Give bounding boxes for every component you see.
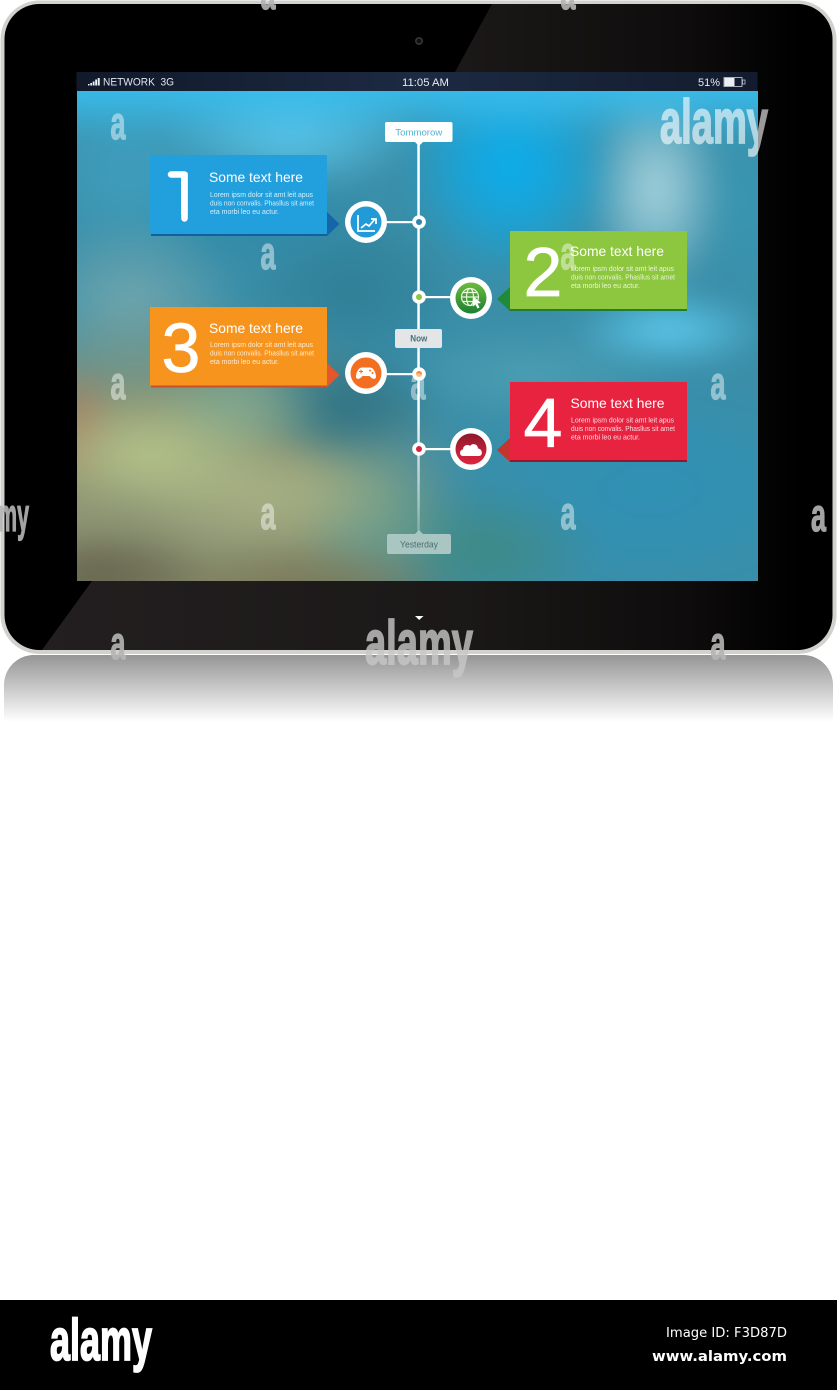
body text: eta morbi leo eu actur. (210, 359, 279, 366)
label: Yesterday: Yesterday (400, 540, 438, 550)
signal bars icon (88, 78, 100, 86)
connector and node (386, 367, 426, 381)
body text: eta morbi leo eu actur. (571, 283, 640, 290)
watermarks: a (710, 617, 726, 669)
connector and node (412, 442, 452, 456)
panel: step 4 (412, 382, 687, 470)
network label: NETWORK 3G (103, 76, 174, 88)
footer bar (0, 1300, 837, 1390)
panel: step 3 (150, 307, 426, 394)
watermarks: a (110, 617, 126, 669)
number 3: 3 (162, 309, 200, 387)
image id: Image ID: F3D87D (666, 1326, 787, 1341)
body text: Lorem ipsm dolor sit amt leit apus (210, 192, 313, 199)
body text: Lorem ipsm dolor sit amt leit apus (571, 266, 674, 273)
clock: 11:05 AM (402, 77, 449, 89)
icon: game controller (345, 352, 387, 394)
number 1: 1 (164, 158, 202, 236)
body text: Lorem ipsm dolor sit amt leit apus (210, 342, 313, 349)
body text (571, 418, 675, 442)
body text: duis non convalis. Phasllus sit amet (210, 200, 314, 208)
watermarks: alamy (660, 88, 768, 157)
watermarks: a (560, 227, 576, 279)
battery percent: 51% (698, 77, 720, 89)
label: Yesterday (387, 530, 451, 554)
watermarks: a (410, 357, 426, 409)
home indicator (415, 616, 424, 620)
body text: eta morbi leo eu actur. (210, 209, 279, 216)
watermarks: a (811, 489, 826, 541)
watermarks: a (710, 357, 726, 409)
body text: duis non convalis. Phasllus sit amet (571, 274, 675, 282)
watermarks (0, 0, 826, 678)
heading: Some text here (570, 243, 664, 259)
body text (210, 342, 314, 366)
reflection (4, 655, 833, 722)
tablet body (0, 0, 836, 654)
heading: Some text here (209, 320, 303, 336)
label: Tommorow (385, 122, 452, 146)
watermarks: a (110, 357, 126, 409)
timeline axis (417, 142, 420, 532)
body text: eta morbi leo eu actur. (571, 434, 640, 442)
number 4: 4 (524, 384, 562, 462)
watermarks: a (560, 487, 576, 539)
screen background (76, 91, 758, 581)
body text: duis non convalis. Phasllus sit amet (571, 426, 675, 433)
number 2: 2 (524, 233, 562, 311)
camera (416, 38, 422, 44)
watermarks: alamy (365, 609, 473, 678)
watermarks: a (110, 97, 126, 149)
status bar (76, 72, 758, 91)
battery icon (724, 78, 745, 86)
connector and node (386, 215, 426, 229)
timeline (385, 122, 452, 554)
heading: Some text here (570, 395, 665, 411)
footer logo: alamy (50, 1308, 152, 1373)
icon: chart (345, 201, 387, 243)
watermarks: a (260, 227, 276, 279)
heading: Some text here (209, 169, 303, 185)
label: Tommorow: Tommorow (395, 128, 443, 138)
number 1 (168, 171, 188, 222)
body text: duis non convalis. Phasllus sit amet (210, 350, 314, 358)
connector and node (412, 290, 452, 304)
icon: globe with cursor (450, 277, 492, 319)
website: www.alamy.com (652, 1349, 787, 1365)
body text (210, 192, 314, 216)
label: Now (395, 329, 442, 348)
body text (571, 266, 675, 290)
watermarks: a (260, 487, 276, 539)
panel: step 1 (150, 155, 426, 243)
label: Now: Now (410, 334, 428, 344)
icon: cloud (450, 428, 492, 470)
body text: Lorem ipsm dolor sit amt leit apus (571, 418, 674, 424)
panel: step 2 (412, 231, 687, 319)
